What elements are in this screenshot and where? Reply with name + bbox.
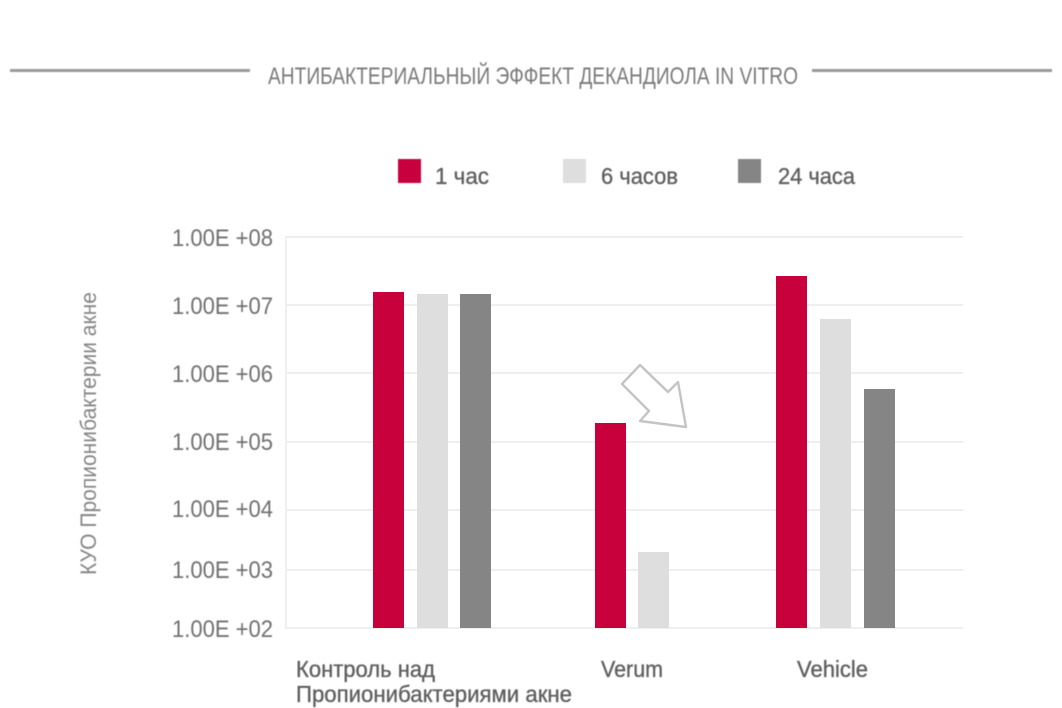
y axis labels: 1.00E +08 — [172, 225, 273, 252]
x axis labels: Контроль над — [296, 656, 436, 682]
x axis labels: Verum — [601, 656, 663, 682]
x axis labels — [296, 656, 868, 707]
legend: 6 часов — [601, 163, 678, 189]
legend — [398, 159, 855, 189]
legend: 1 час — [435, 163, 489, 189]
legend: 24 часа — [778, 163, 855, 189]
title with side rules: АНТИБАКТЕРИАЛЬНЫЙ ЭФФЕКТ ДЕКАНДИОЛА IN VITRO — [268, 62, 798, 90]
y axis title: КУО Пропионибактерии акне — [76, 292, 101, 575]
arrow: downward trend — [622, 365, 686, 427]
x axis labels: Пропионибактериями акне — [296, 681, 572, 707]
y axis labels: 1.00E +05 — [172, 429, 273, 456]
title with side rules — [10, 62, 1052, 90]
y axis labels: 1.00E +02 — [172, 616, 273, 643]
y axis labels: 1.00E +04 — [172, 496, 273, 523]
bars: control — [373, 292, 491, 628]
y axis labels: 1.00E +07 — [172, 293, 273, 320]
y axis labels: 1.00E +06 — [172, 361, 273, 388]
bars: verum — [595, 423, 669, 628]
grid lines — [285, 236, 963, 629]
y axis labels: 1.00E +03 — [172, 557, 273, 584]
bars: vehicle — [776, 276, 895, 628]
x axis labels: Vehicle — [797, 656, 868, 682]
y axis labels — [172, 225, 273, 643]
